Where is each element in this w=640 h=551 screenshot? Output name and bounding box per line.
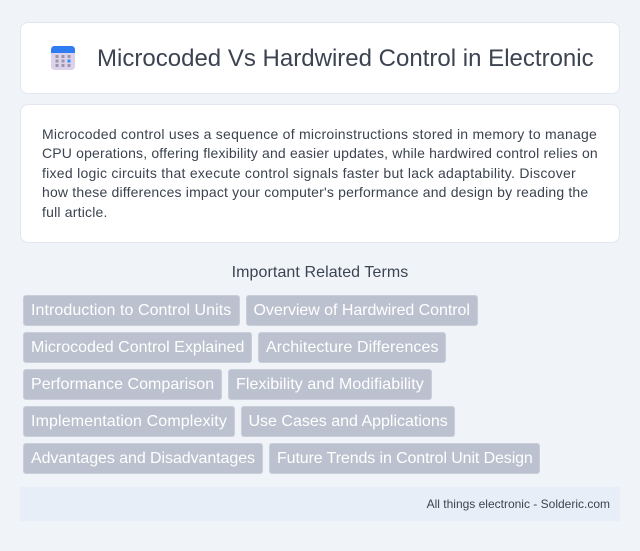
tag: Advantages and Disadvantages: [31, 450, 255, 467]
header panel: [20, 22, 620, 94]
summary text: [42, 126, 598, 220]
tag: [23, 332, 252, 363]
summary text: full article.: [42, 204, 108, 220]
icon: calculator grid: [51, 46, 75, 70]
tag: [258, 332, 446, 363]
tag: Future Trends in Control Unit Design: [277, 450, 533, 467]
tag: [246, 295, 478, 326]
tag: [228, 369, 432, 400]
tag: [23, 443, 263, 474]
tag: Use Cases and Applications: [248, 413, 448, 430]
tag: Microcoded Control Explained: [31, 339, 244, 356]
summary text: fixed logic circuits that execute control signals faster but lack adaptability. Discover: [42, 165, 576, 181]
footer text: All things electronic - Solderic.com: [427, 497, 610, 511]
summary text: Microcoded control uses a sequence of microinstructions stored in memory to manage: [42, 126, 597, 142]
tag: [23, 295, 240, 326]
tag: [241, 406, 455, 437]
summary text: how these differences impact your computer's performance and design by reading the: [42, 184, 588, 200]
tag: Implementation Complexity: [31, 413, 227, 430]
tag: [269, 443, 540, 474]
tag: [23, 406, 235, 437]
tag: Overview of Hardwired Control: [254, 302, 470, 319]
title: Microcoded Vs Hardwired Control in Electronic: [97, 45, 594, 72]
tag: Architecture Differences: [266, 339, 439, 356]
heading: important related terms: Important Related Terms: [232, 264, 408, 281]
footer bar: [20, 487, 620, 521]
summary panel: [20, 104, 620, 243]
tag: [23, 369, 222, 400]
summary text: CPU operations, offering flexibility and easier updates, while hardwired control relies on: [42, 145, 598, 161]
tag: Performance Comparison: [31, 376, 214, 393]
tag: Introduction to Control Units: [31, 302, 231, 319]
tag list: [23, 295, 540, 474]
tag: Flexibility and Modifiability: [236, 376, 424, 393]
